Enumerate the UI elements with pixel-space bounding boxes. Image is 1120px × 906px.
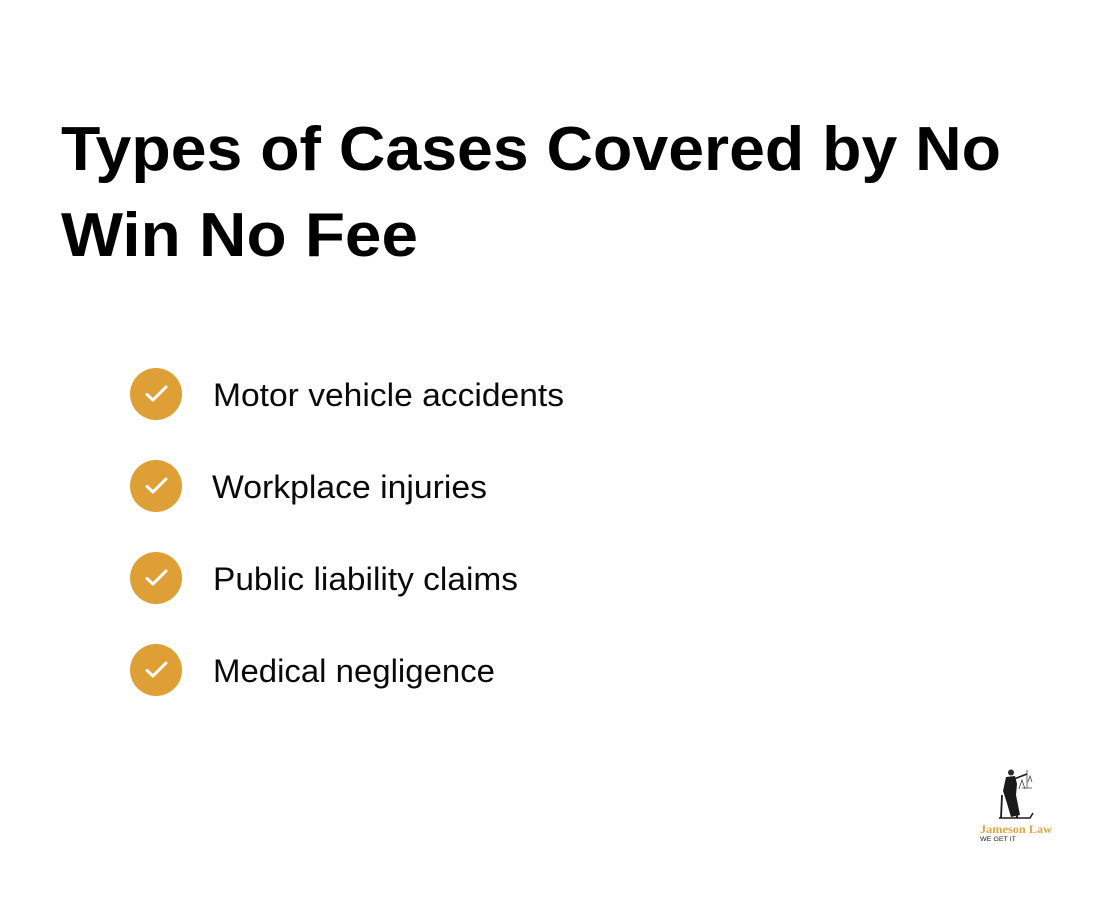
item: medical negligence [130, 644, 495, 696]
title: Win No Fee [61, 201, 418, 270]
item: motor vehicle accidents: Motor vehicle accidents [213, 377, 564, 413]
item: workplace injuries [130, 460, 487, 512]
item: public liability claims [130, 552, 518, 604]
item: motor vehicle accidents [130, 368, 564, 420]
icon: lady justice with L [999, 770, 1033, 818]
item: public liability claims: Public liability claims [213, 561, 518, 597]
logo tagline: WE GET IT [980, 836, 1016, 843]
checklist [130, 368, 564, 696]
title: Types of Cases Covered by No [61, 115, 1001, 184]
logo: Jameson Law [980, 770, 1053, 843]
item: medical negligence: Medical negligence [213, 653, 495, 689]
title [61, 115, 1001, 270]
item: workplace injuries: Workplace injuries [212, 469, 487, 505]
logo name: Jameson Law [980, 824, 1053, 836]
